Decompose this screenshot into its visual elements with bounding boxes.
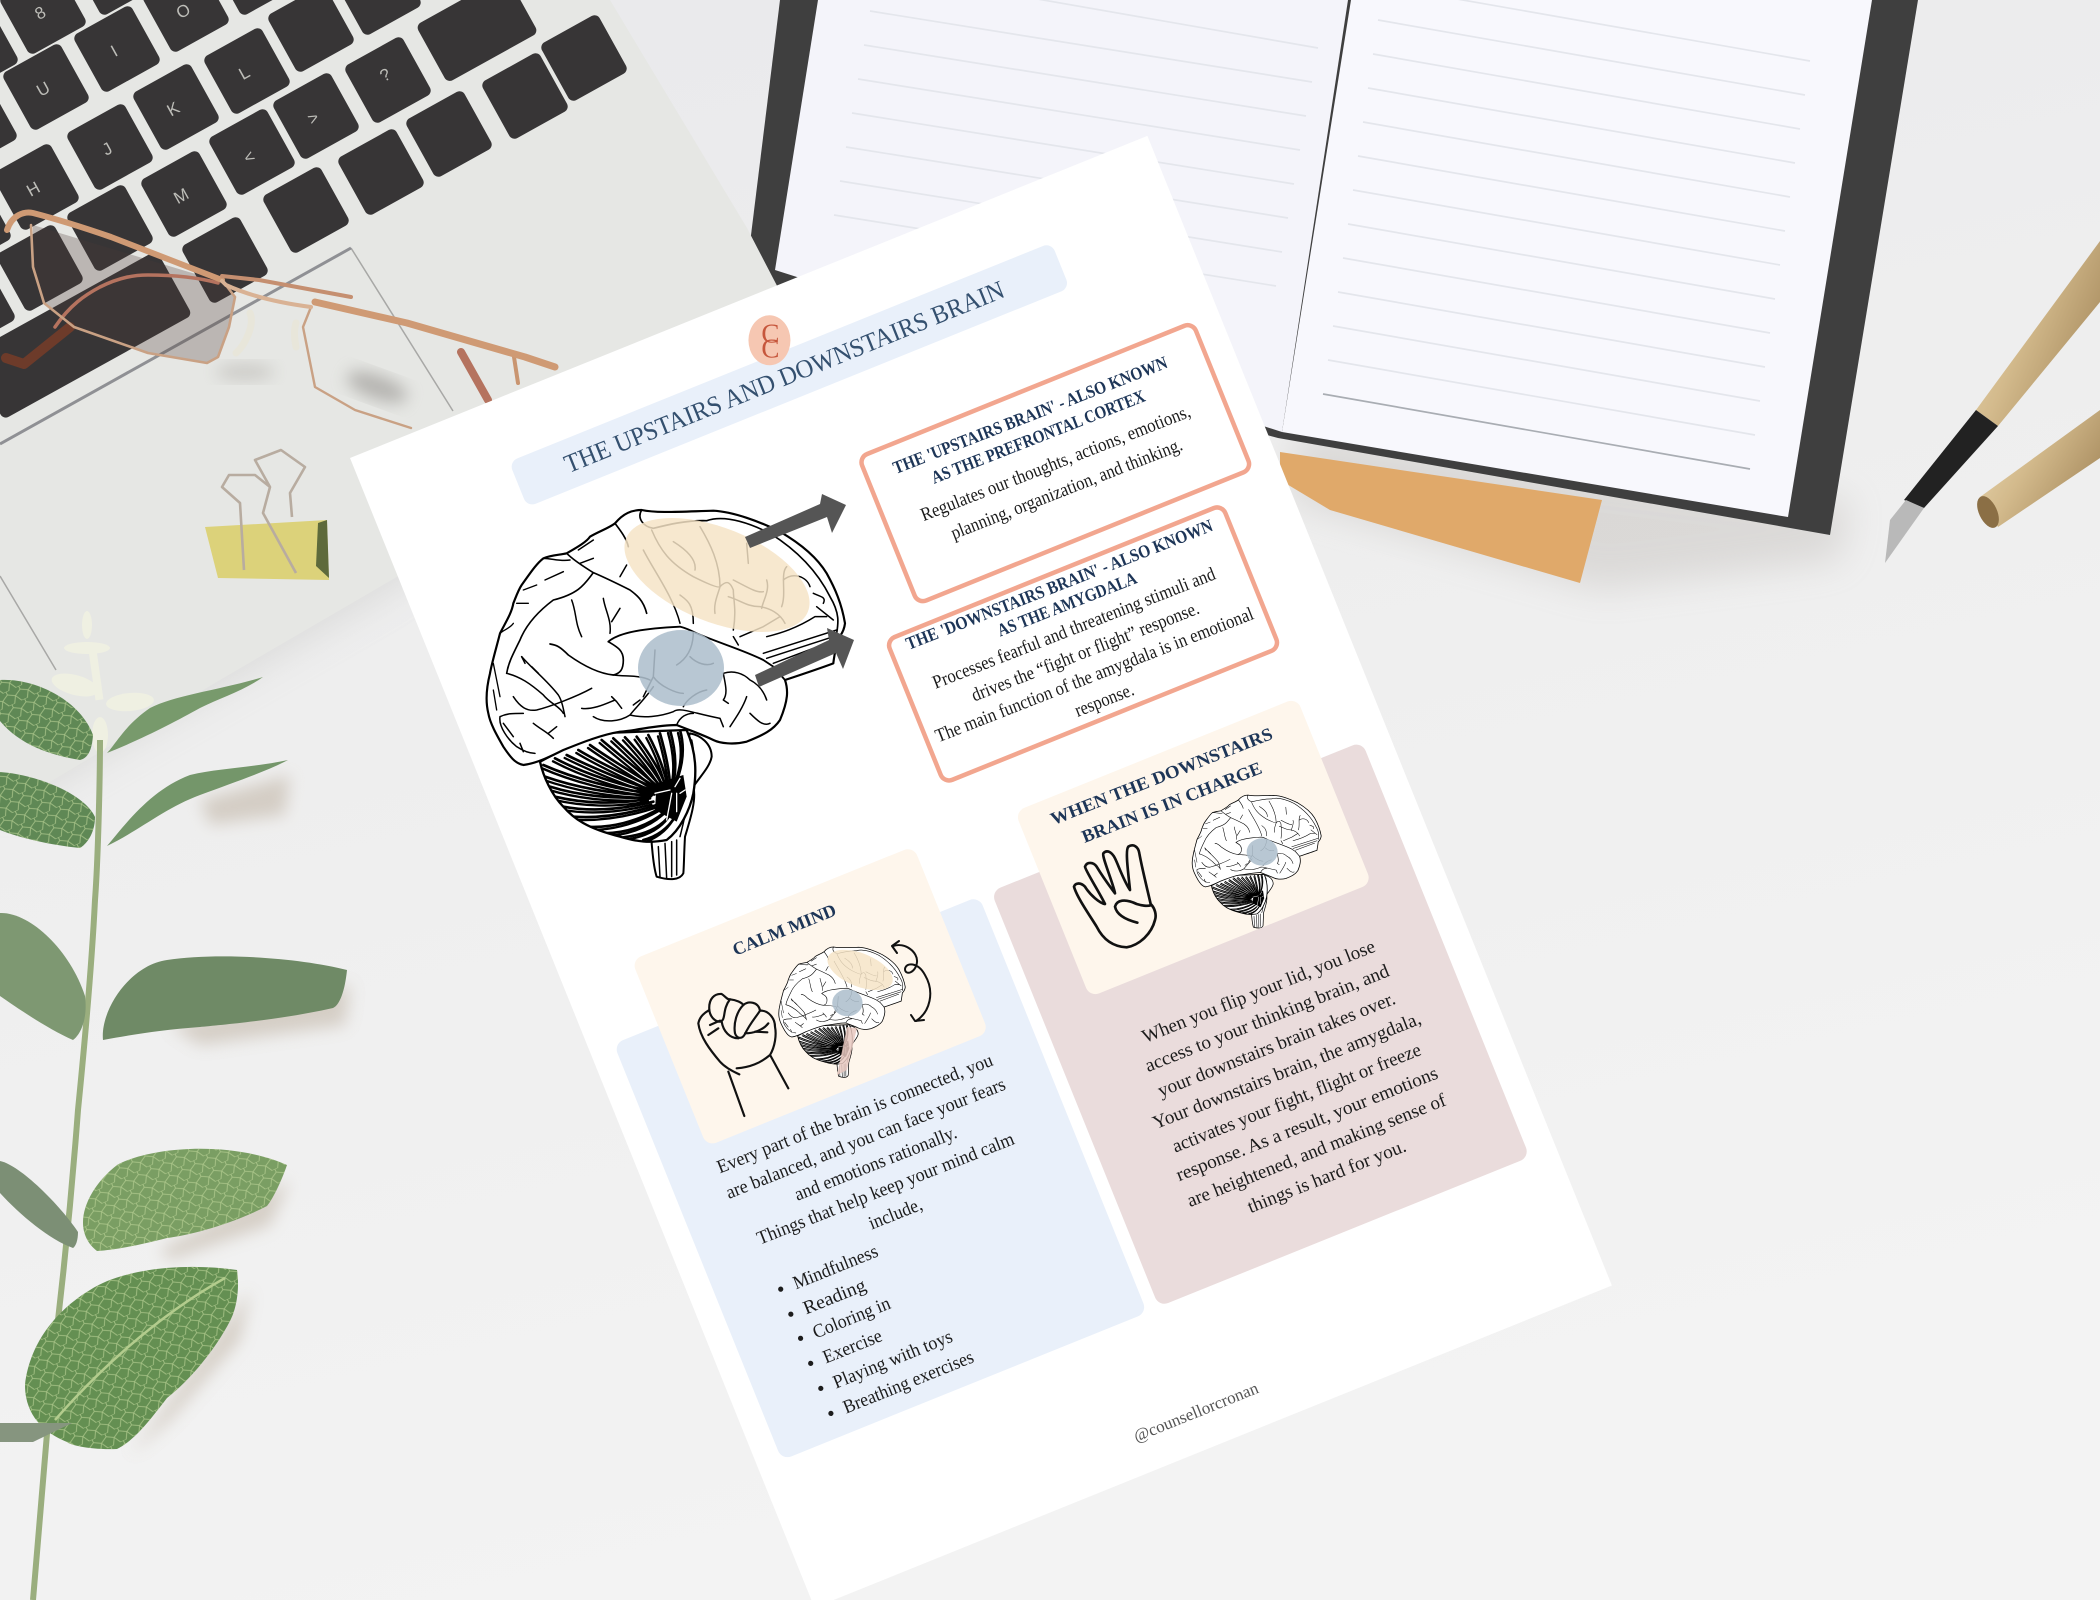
calm mind list: Coloring in bbox=[810, 1293, 894, 1343]
upstairs body text: Regulates our thoughts, actions, emotions, bbox=[918, 401, 1194, 526]
leaves bbox=[0, 680, 93, 760]
downstairs heading: THE 'DOWNSTAIRS BRAIN' - ALSO KNOWN bbox=[903, 515, 1216, 654]
downstairs in charge body text: Your downstairs brain, the amygdala, bbox=[1150, 1008, 1424, 1134]
laptop bbox=[0, 0, 800, 810]
downstairs body text: drives the “fight or flight” response. bbox=[968, 598, 1202, 706]
icon: calm brain bbox=[779, 942, 905, 1077]
binder clip bbox=[205, 450, 329, 580]
upstairs heading: AS THE PREFRONTAL CORTEX bbox=[928, 386, 1148, 488]
title: THE UPSTAIRS AND DOWNSTAIRS BRAIN bbox=[560, 275, 1009, 479]
downstairs body text bbox=[914, 556, 1267, 772]
panel: downstairs brain bbox=[886, 505, 1280, 783]
downstairs in charge body text: things is hard for you. bbox=[1245, 1136, 1409, 1218]
calm mind list: Exercise bbox=[820, 1326, 885, 1368]
calm mind list: Breathing exercises bbox=[840, 1347, 977, 1418]
calm mind list bbox=[775, 1223, 977, 1425]
keyboard keys bbox=[0, 0, 629, 420]
downstairs in charge body text: are heightened, and making sense of bbox=[1184, 1090, 1450, 1212]
large brain illustration bbox=[487, 495, 845, 879]
downstairs in charge body text: your downstairs brain takes over. bbox=[1155, 988, 1399, 1102]
icon: rotation arrows bbox=[892, 941, 930, 1021]
gold pen cap bbox=[1973, 410, 2100, 531]
key labels: 8 bbox=[32, 3, 49, 24]
glasses bbox=[6, 213, 555, 428]
panel: calm mind bbox=[587, 830, 1147, 1460]
upstairs highlight bbox=[609, 495, 825, 655]
downstairs in charge body text: access to your thinking brain, and bbox=[1142, 961, 1393, 1077]
calm mind list: Mindfulness bbox=[790, 1241, 881, 1294]
notebook bbox=[744, 0, 1918, 590]
calm mind body text: Things that help keep your mind calm bbox=[754, 1129, 1018, 1249]
logo: C bbox=[761, 318, 779, 348]
downstairs body text: Processes fearful and threatening stimuli and bbox=[930, 564, 1219, 694]
amygdala highlight bbox=[638, 630, 724, 706]
key labels: ? bbox=[377, 65, 394, 86]
downstairs in charge body text: response. As a result, your emotions bbox=[1173, 1063, 1441, 1186]
arrow: to downstairs box bbox=[755, 628, 854, 687]
arrow: to upstairs box bbox=[745, 494, 846, 548]
key labels: L bbox=[236, 63, 253, 84]
downstairs header card bbox=[1015, 698, 1372, 997]
gold fountain pen bbox=[1885, 241, 2100, 563]
key labels: J bbox=[99, 139, 116, 160]
flower bbox=[49, 611, 155, 753]
downstairs in charge body text: activates your fight, flight or freeze bbox=[1169, 1040, 1424, 1157]
calm mind body text: Every part of the brain is connected, you bbox=[714, 1050, 996, 1178]
downstairs heading: AS THE AMYGDALA bbox=[994, 568, 1139, 640]
logo bbox=[748, 315, 790, 365]
upstairs body text: planning, organization, and thinking. bbox=[948, 434, 1186, 544]
key labels: > bbox=[304, 107, 322, 129]
downstairs in charge body text bbox=[1119, 930, 1466, 1239]
downstairs body text: response. bbox=[1072, 679, 1137, 722]
panel: downstairs in charge bbox=[967, 681, 1530, 1307]
stem bbox=[33, 740, 100, 1600]
icon: open hand bbox=[1074, 845, 1156, 947]
worksheet page bbox=[350, 136, 1612, 1600]
upstairs heading: THE 'UPSTAIRS BRAIN' - ALSO KNOWN bbox=[890, 352, 1170, 478]
calm mind list: Playing with toys bbox=[830, 1326, 956, 1393]
key labels: H bbox=[23, 178, 43, 200]
calm mind list: Reading bbox=[800, 1275, 870, 1319]
upstairs heading bbox=[890, 352, 1179, 499]
calm mind body text: and emotions rationally. bbox=[791, 1122, 960, 1206]
calm mind heading: CALM MIND bbox=[730, 900, 839, 960]
calm brain stem tint bbox=[837, 1027, 857, 1075]
tan block under notebook bbox=[1280, 452, 1602, 583]
calm mind header card bbox=[632, 846, 989, 1146]
title banner bbox=[509, 243, 1070, 507]
key labels bbox=[23, 0, 394, 208]
leaf shadows bbox=[130, 775, 350, 1455]
key labels: O bbox=[173, 0, 194, 23]
icon: when brain bbox=[1192, 795, 1321, 928]
downstairs body text: The main function of the amygdala is in emotional bbox=[932, 604, 1257, 747]
footer handle: @counsellorcronan bbox=[1131, 1378, 1262, 1446]
calm mind body text: include, bbox=[866, 1194, 926, 1234]
calm mind body text bbox=[713, 1049, 1039, 1279]
downstairs in charge body text: When you flip your lid, you lose bbox=[1139, 936, 1378, 1048]
key labels: U bbox=[33, 78, 53, 100]
icon: fist bbox=[698, 994, 788, 1116]
downstairs in charge heading: WHEN THE DOWNSTAIRS bbox=[1048, 723, 1275, 829]
logo: C bbox=[761, 333, 779, 363]
key labels: < bbox=[240, 146, 258, 168]
panel: upstairs brain bbox=[859, 322, 1252, 604]
calm mind body text: are balanced, and you can face your fears bbox=[723, 1074, 1009, 1204]
plant bbox=[0, 611, 350, 1600]
key labels: K bbox=[164, 98, 183, 120]
key labels: I bbox=[108, 42, 121, 61]
key labels: M bbox=[171, 184, 192, 208]
downstairs in charge heading: BRAIN IS IN CHARGE bbox=[1079, 758, 1265, 847]
